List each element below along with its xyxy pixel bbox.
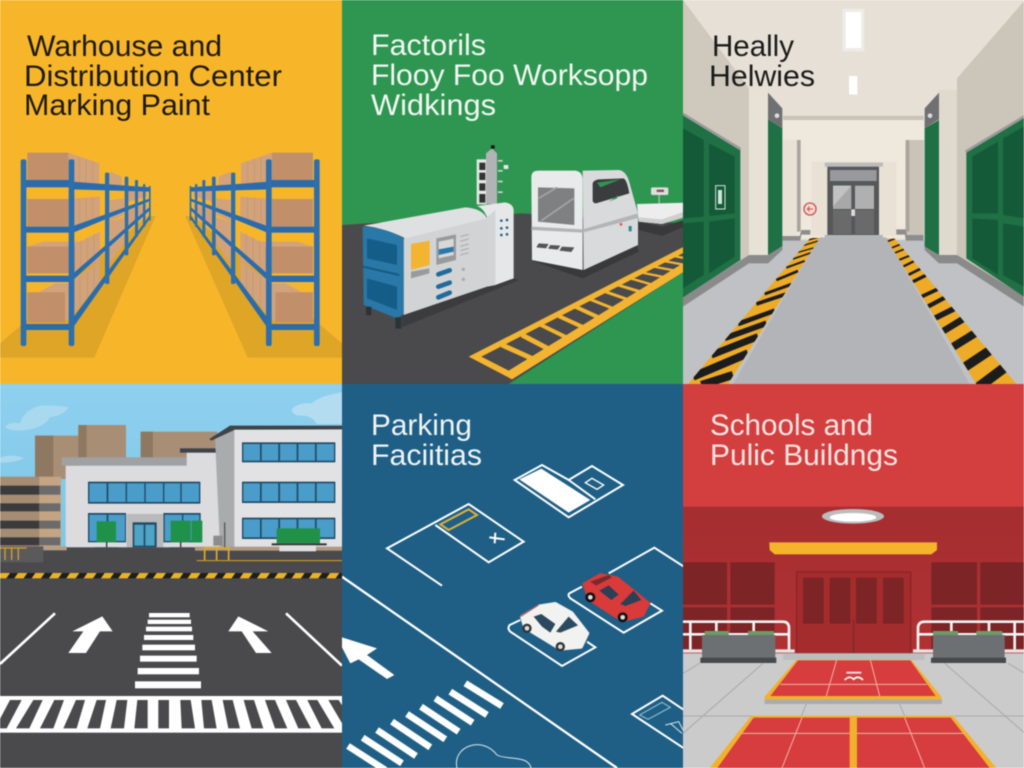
clouds <box>0 392 342 462</box>
illustration: factory machines <box>342 145 685 384</box>
heading: schools: Schools and <box>710 409 873 442</box>
wall <box>683 507 1024 655</box>
yellow canopy <box>769 542 937 554</box>
illustration: warehouse shelving <box>0 153 342 358</box>
background buildings <box>0 425 217 547</box>
sky <box>0 384 342 551</box>
lower right bay <box>632 696 684 748</box>
cardboard boxes <box>27 153 147 322</box>
tower <box>477 145 508 204</box>
road edge line <box>342 577 617 768</box>
heading: schools <box>710 409 898 472</box>
asphalt road surface <box>0 547 342 768</box>
right hazard floor stripe <box>885 238 1016 390</box>
outline blob <box>456 745 531 768</box>
left railing <box>683 622 795 652</box>
heading: factories: Widkings <box>371 89 496 122</box>
heading: hallways <box>710 34 815 87</box>
icon: red car <box>584 575 649 622</box>
threshold step <box>783 653 925 660</box>
heading: hallways: Helwies <box>709 60 815 93</box>
site details and railings <box>0 522 342 562</box>
illustration: school entrance <box>683 507 1024 768</box>
heading: parking: Faciitias <box>371 439 482 472</box>
machine shadow <box>402 278 519 327</box>
right shelving rack <box>190 153 320 346</box>
right machine <box>531 170 639 278</box>
road markings <box>0 613 342 688</box>
arrow <box>342 637 394 679</box>
parking bay with white block <box>515 465 623 517</box>
tall office building <box>209 426 342 547</box>
left machine <box>363 202 514 329</box>
parking bay with cross <box>387 504 524 586</box>
panel: outdoor site and roads <box>0 384 357 768</box>
heading: warehouse: Distribution Center <box>24 60 282 93</box>
floor <box>683 653 1024 768</box>
main low building <box>62 448 220 547</box>
floor joints <box>683 663 1024 733</box>
heading: hallways: Heally <box>712 30 794 63</box>
side windows <box>683 562 1024 649</box>
skirting near door <box>782 229 924 241</box>
right wall <box>925 0 1024 307</box>
panel: healthy hallways <box>683 0 1024 390</box>
hazard line <box>0 573 342 578</box>
crosswalk stripes <box>348 683 502 768</box>
ceiling lamp <box>822 509 884 524</box>
right planter <box>931 631 1006 663</box>
shelf rails <box>23 180 150 330</box>
ceiling lights <box>842 8 864 95</box>
red car bay <box>569 548 684 633</box>
large crosswalk <box>0 696 357 733</box>
heading: parking <box>371 409 482 472</box>
heading: factories: Flooy Foo Worksopp <box>371 59 648 92</box>
white car bay <box>508 620 595 666</box>
heading: warehouse <box>24 30 282 122</box>
entrance trees <box>94 521 202 550</box>
ceiling <box>683 0 1024 240</box>
floor <box>683 240 1024 384</box>
panel: warehouse and distribution center <box>0 0 342 384</box>
panel: schools and public buildings <box>683 384 1024 768</box>
floor centre aisle <box>733 237 970 384</box>
left wall <box>683 0 782 307</box>
heading: factories: Factorils <box>371 29 486 62</box>
heading: warehouse: Marking Paint <box>24 89 211 122</box>
icon: white car <box>520 603 588 651</box>
left shelving rack <box>21 153 151 346</box>
heading: warehouse: Warhouse and <box>27 30 222 63</box>
back wall and door <box>782 115 924 238</box>
panel: factories floor <box>342 0 685 384</box>
red floor mat near door <box>765 660 942 704</box>
factory floor <box>342 213 684 384</box>
illustration: parking lot <box>342 465 684 768</box>
yellow hatched floor marking <box>469 247 685 379</box>
left hazard floor stripe <box>688 237 821 385</box>
shelf posts <box>21 159 151 346</box>
right railing <box>913 622 1024 651</box>
heading: schools: Pulic Buildngs <box>710 439 898 472</box>
panel: parking facilities <box>342 384 684 768</box>
raised table <box>637 187 684 236</box>
heading: factories <box>371 29 648 122</box>
heading: parking: Parking <box>371 409 472 442</box>
left planter <box>700 631 776 663</box>
floor shadows <box>0 216 342 358</box>
double doors <box>797 572 911 660</box>
red floor mat front <box>710 716 996 768</box>
